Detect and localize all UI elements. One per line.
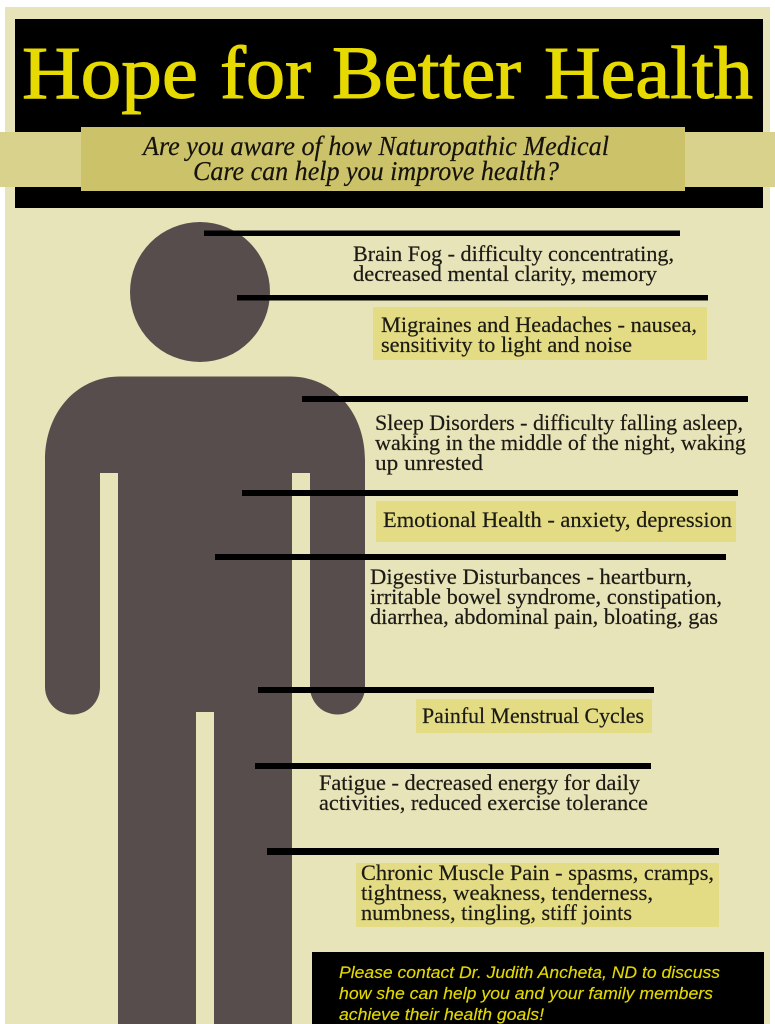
symptom: fatigue: activities, reduced exercise tolerance: [319, 790, 648, 815]
symptom: digestive disturbances: Digestive Disturbances - heartburn,: [370, 564, 692, 589]
symptom: brain fog: Brain Fog - difficulty concentrating,: [353, 241, 674, 266]
symptom: sleep disorders: waking in the middle of the night, waking: [375, 430, 746, 455]
subtitle: Care can help you improve health?: [193, 156, 559, 186]
callout: contact: [312, 952, 764, 1024]
symptom: chronic muscle pain: tightness, weakness, tenderness,: [361, 880, 653, 905]
symptom: chronic muscle pain: Chronic Muscle Pain - spasms, cramps,: [361, 860, 714, 885]
icon: human figure: [45, 222, 365, 1024]
contact text: Please contact Dr. Judith Ancheta, ND to discuss: [339, 963, 721, 982]
symptom: emotional health: Emotional Health - anxiety, depression: [383, 507, 732, 532]
banner: subtitle ribbon: [0, 127, 775, 191]
symptom: sleep disorders: Sleep Disorders - difficulty falling asleep,: [375, 410, 743, 435]
title: Better: [332, 32, 521, 115]
symptom: migraines: sensitivity to light and noise: [381, 332, 632, 357]
symptom: chronic muscle pain: numbness, tingling, stiff joints: [361, 900, 632, 925]
symptom: menstrual cycles: Painful Menstrual Cycles: [422, 703, 644, 728]
symptom: migraines: Migraines and Headaches - nausea,: [381, 312, 697, 337]
symptom: digestive disturbances: irritable bowel syndrome, constipation,: [370, 584, 722, 609]
title: Health: [544, 32, 753, 115]
panel: title header: [15, 19, 763, 208]
symptom highlight boxes: [356, 307, 736, 927]
symptom: sleep disorders: up unrested: [375, 450, 483, 475]
symptom: fatigue: Fatigue - decreased energy for daily: [319, 770, 640, 795]
symptom: brain fog: decreased mental clarity, memory: [353, 261, 657, 286]
title: for: [220, 32, 311, 115]
pointer lines: [204, 230, 748, 855]
contact text: achieve their health goals!: [339, 1005, 544, 1024]
contact text: how she can help you and your family members: [339, 984, 714, 1003]
subtitle: Are you aware of how Naturopathic Medical: [141, 131, 609, 161]
symptom: digestive disturbances: diarrhea, abdominal pain, bloating, gas: [370, 604, 718, 629]
title: Hope: [22, 32, 198, 115]
